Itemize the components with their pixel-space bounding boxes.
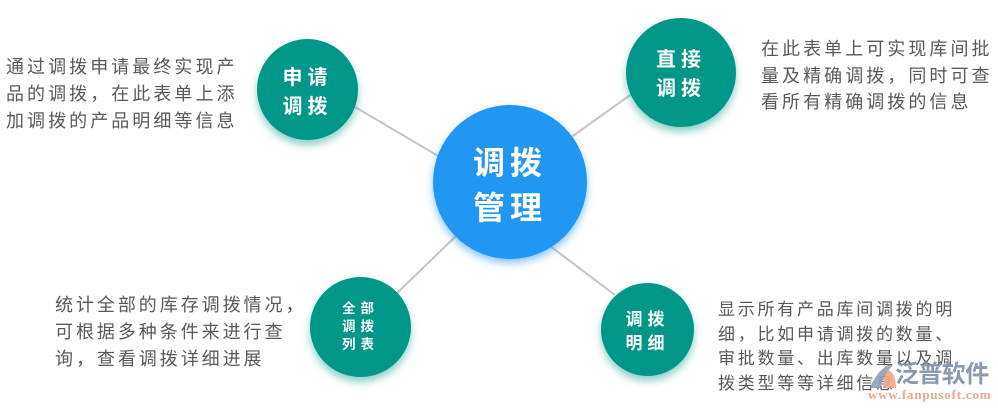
text: transfer details description: 审批数量、出库数量以及调 <box>718 349 955 368</box>
text: apply for transfer description <box>6 57 238 131</box>
node: transfer details: 明细 <box>626 334 670 353</box>
text: full list description <box>55 295 306 369</box>
node: transfer details <box>601 283 694 376</box>
center node: 调拨 <box>473 145 547 181</box>
text: transfer details description: 拨类型等等详细信息 <box>718 374 896 393</box>
node: apply for transfer: 调拨 <box>282 96 332 118</box>
text: full list description: 可根据多种条件来进行查 <box>55 322 285 342</box>
watermark name: 泛普软件 <box>895 361 989 388</box>
node: full transfer list: 调拨 <box>342 319 379 334</box>
watermark url: www.fanpusoft.com <box>868 387 991 402</box>
text: apply for transfer description: 品的调拨，在此表单上添 <box>6 84 238 104</box>
node: full transfer list: 全部 <box>342 301 379 316</box>
node: apply for transfer: 申请 <box>282 67 332 89</box>
text: full list description: 询，查看调拨详细进展 <box>55 349 264 369</box>
node: full transfer list: 列表 <box>342 337 379 352</box>
watermark: fanpusoft logo <box>868 361 991 402</box>
text: transfer details description: 细，比如申请调拨的数量、 <box>718 325 955 344</box>
text: transfer details description: 显示所有产品库间调拨的明 <box>718 300 955 319</box>
node: apply for transfer <box>257 39 358 140</box>
node: direct transfer: 调拨 <box>656 78 706 100</box>
node: transfer details: 调拨 <box>626 310 670 329</box>
text: direct transfer description: 在此表单上可实现库间批 <box>761 39 993 59</box>
text: apply for transfer description: 加调拨的产品明细等信息 <box>6 111 238 131</box>
text: full list description: 统计全部的库存调拨情况， <box>55 295 306 315</box>
node: direct transfer <box>626 18 736 127</box>
icon: logo mark <box>870 365 896 388</box>
text: direct transfer description: 量及精确调拨，同时可查 <box>761 66 993 86</box>
node: direct transfer: 直接 <box>656 49 706 71</box>
center node <box>433 105 587 259</box>
text: apply for transfer description: 通过调拨申请最终实现产 <box>6 57 238 77</box>
text: direct transfer description: 看所有精确调拨的信息 <box>761 92 972 112</box>
center node: 管理 <box>473 190 547 226</box>
text: direct transfer description <box>761 39 993 112</box>
text: transfer details description <box>718 300 955 393</box>
node: full transfer list <box>310 277 411 377</box>
